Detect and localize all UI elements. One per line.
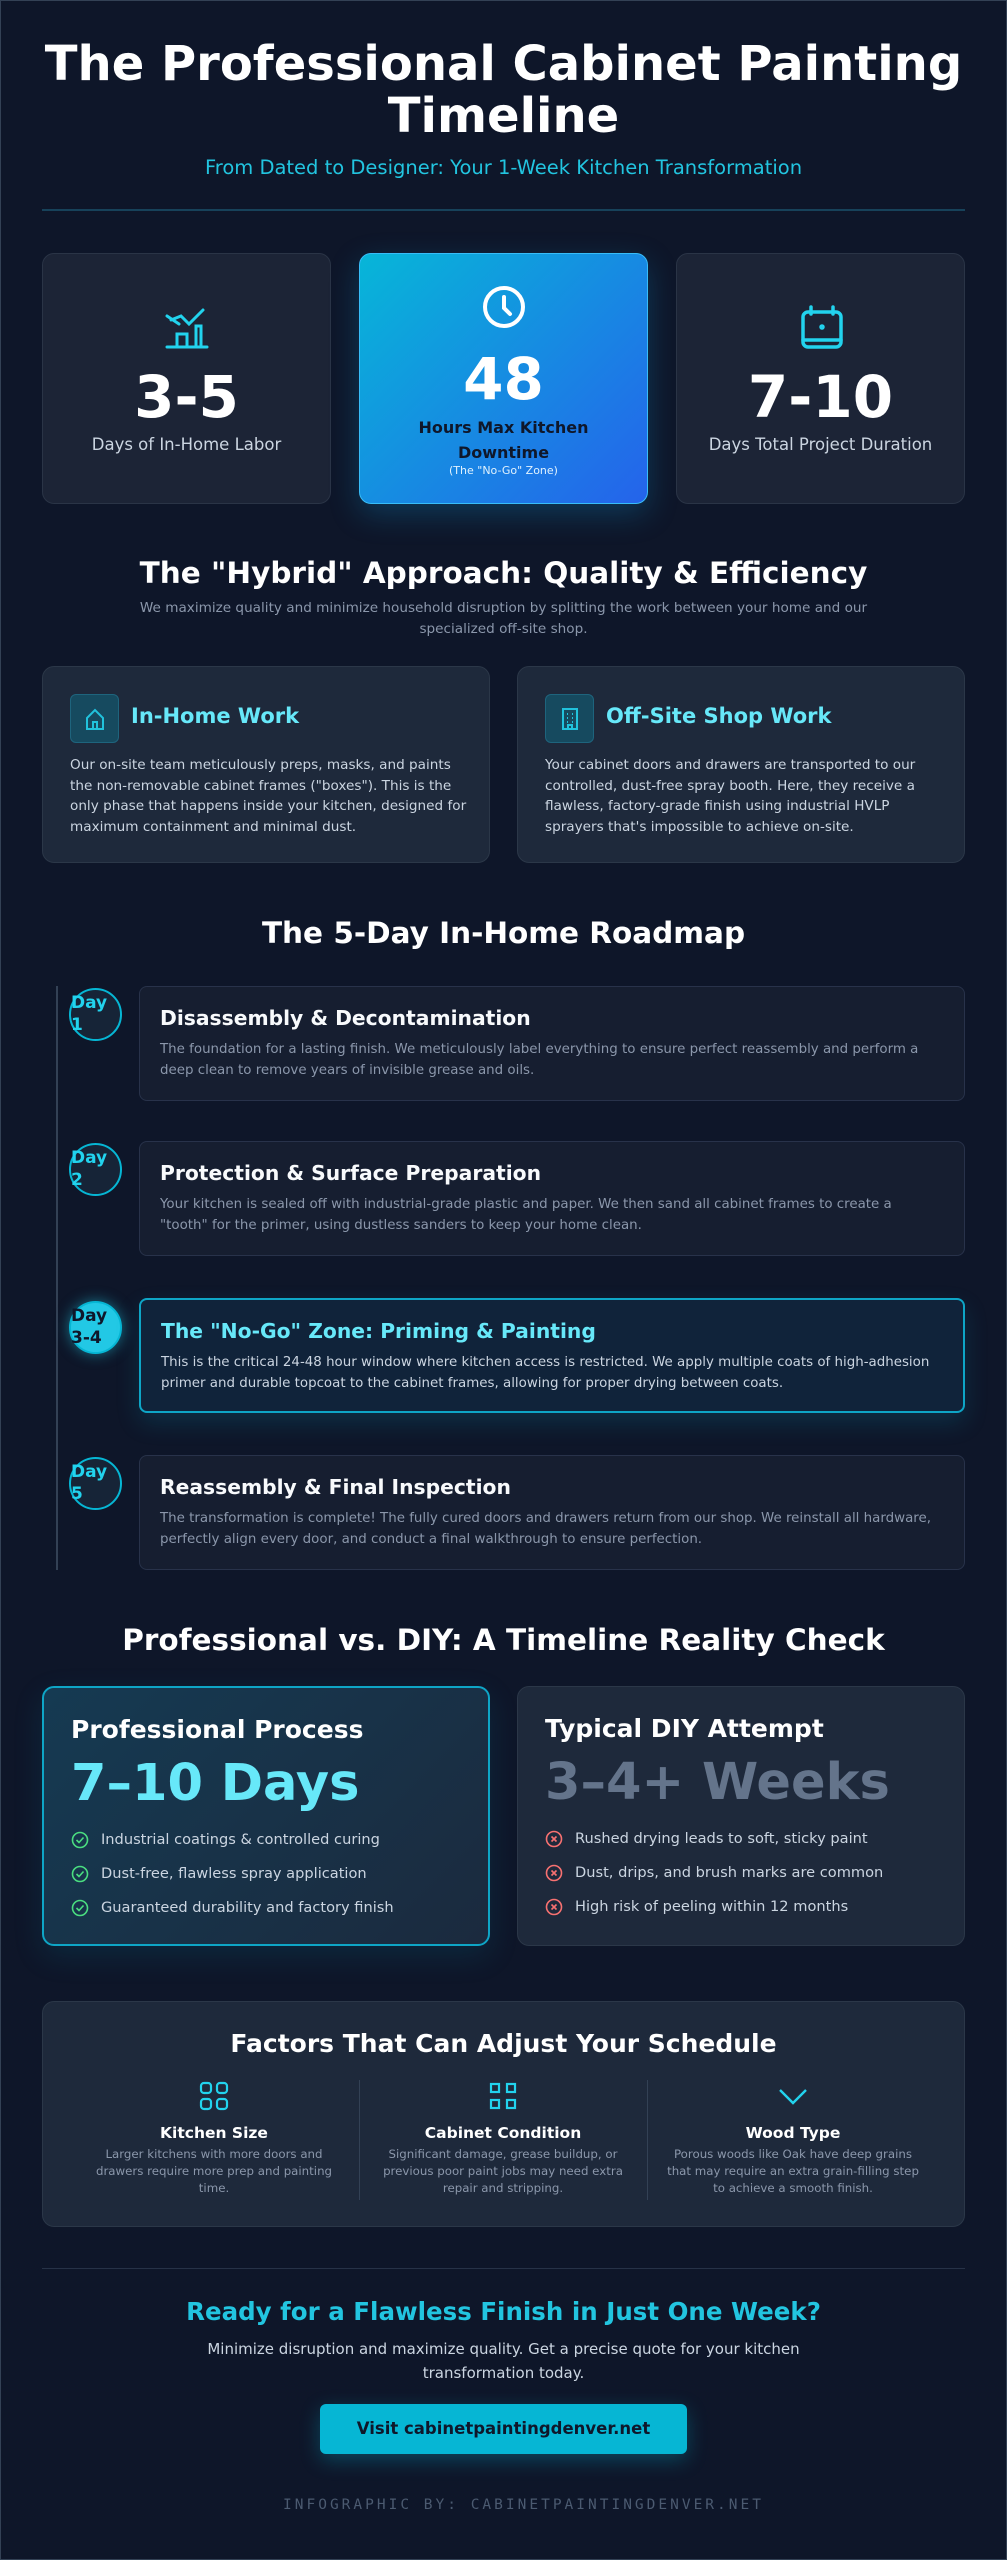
factor: cabinet condition	[383, 2082, 623, 2195]
card: protection: Protection & Surface Preparation	[160, 1161, 541, 1185]
card: no-go zone: The "No-Go" Zone: Priming & Painting	[161, 1319, 596, 1343]
hybrid intro text: We maximize quality and minimize household disruption by splitting the work between your home and our specialized off-site shop.	[140, 600, 867, 637]
timeline day 2: Day	[71, 1148, 107, 1168]
panel: off-site shop work: Off-Site Shop Work	[606, 704, 832, 728]
stat card: total duration: 7-10	[748, 363, 893, 431]
panel: in-home work	[42, 666, 490, 863]
stat card: 48 hours: (The "No-Go" Zone)	[449, 464, 558, 477]
factor: cabinet condition: Cabinet Condition	[425, 2124, 581, 2142]
card: reassembly: Reassembly & Final Inspection	[160, 1475, 511, 1499]
heading: hybrid: The "Hybrid" Approach: Quality & Efficiency	[140, 556, 867, 590]
card: protection: Your kitchen is sealed off with industrial-grade plastic and paper. We then sand all cabinet frames to create a	[160, 1197, 892, 1212]
panel: off-site shop work	[517, 666, 965, 863]
title: Timeline	[388, 88, 619, 144]
stat card: days in-home: Days of In-Home Labor	[92, 435, 281, 454]
CTA text: Minimize disruption and maximize quality. Get a precise quote for your kitchen transformation today.	[207, 2340, 800, 2382]
CTA heading: Ready for a Flawless Finish in Just One Week?	[186, 2297, 821, 2326]
timeline day 1	[69, 986, 965, 1101]
title	[44, 36, 962, 144]
footer credit: INFOGRAPHIC BY: CABINETPAINTINGDENVER.NET	[283, 2497, 764, 2513]
timeline day 1: Day	[71, 993, 107, 1013]
card: no-go zone: This is the critical 24-48 hour window where kitchen access is restricted. We apply multiple coats of high-adhesion primer and durable topcoat to the cabinet frames, allowing for proper drying between coats.	[161, 1355, 929, 1391]
factor: wood type: Porous woods like Oak have deep grains that may require an extra grain-filling step to achieve a smooth finish.	[667, 2147, 919, 2195]
card: disassembly: Disassembly & Decontamination	[160, 1006, 531, 1030]
factor: wood type: Wood Type	[746, 2124, 840, 2142]
list: pro benefits: Dust-free, flawless spray application	[101, 1865, 367, 1882]
factor: kitchen size: Larger kitchens with more doors and drawers require more prep and painting time.	[96, 2147, 332, 2195]
stat card: 48 hours: Hours Max Kitchen	[418, 418, 588, 437]
factor: cabinet condition: Significant damage, grease buildup, or previous poor paint jobs may need extra repair and stripping.	[383, 2147, 623, 2195]
panel: in-home work: Our on-site team meticulously preps, masks, and paints the non-removable cabinet frames ("boxes"). This is the only phase that happens inside your kitchen, designed for maximum containment and minimal dust.	[70, 757, 466, 834]
heading: comparison: Professional vs. DIY: A Timeline Reality Check	[122, 1623, 885, 1657]
list: DIY risks: High risk of peeling within 12 months	[575, 1898, 848, 1915]
stat card: days in-home: 3-5	[134, 363, 239, 431]
panel: professional process: 7–10 Days	[71, 1754, 360, 1813]
timeline day 3-4: Day	[71, 1306, 107, 1326]
heading: roadmap: The 5-Day In-Home Roadmap	[262, 916, 745, 950]
card: disassembly: The foundation for a lasting finish. We meticulously label everything to ensure perfect reassembly and perform a deep clean to remove years of invisible grease and oils.	[160, 1042, 918, 1078]
list: DIY risks	[546, 1830, 883, 1916]
stat card: total duration: Days Total Project Duration	[709, 435, 932, 454]
icon: clock	[483, 286, 525, 328]
icon: building	[545, 694, 594, 743]
stat card: days in-home	[42, 253, 331, 504]
card: reassembly: The transformation is complete! The fully cured doors and drawers return from our shop. We reinstall all hardware, perfectly align every door, and conduct a final walkthrough to ensure perfection.	[160, 1511, 931, 1547]
timeline day 1: 1	[71, 1015, 83, 1035]
title: The Professional Cabinet Painting	[45, 36, 962, 92]
list: pro benefits: Industrial coatings & controlled curing	[101, 1831, 380, 1848]
card: protection	[139, 1141, 965, 1256]
timeline day 5: 5	[71, 1484, 83, 1504]
timeline day 5: Day	[71, 1462, 107, 1482]
timeline day 2: 2	[71, 1170, 83, 1190]
list: DIY risks: Rushed drying leads to soft, sticky paint	[575, 1830, 868, 1847]
panel: DIY attempt	[517, 1686, 965, 1946]
stat card: 48 hours	[359, 253, 648, 504]
icon: house	[70, 694, 119, 743]
subtitle: From Dated to Designer: Your 1-Week Kitchen Transformation	[205, 156, 802, 179]
timeline day 2	[69, 1141, 965, 1256]
card: reassembly	[139, 1455, 965, 1570]
factor: kitchen size: Kitchen Size	[160, 2124, 268, 2142]
panel: DIY attempt: 3–4+ Weeks	[545, 1753, 890, 1812]
panel: DIY attempt: Typical DIY Attempt	[545, 1714, 824, 1743]
factors heading: Factors That Can Adjust Your Schedule	[230, 2029, 777, 2058]
panel: professional process	[42, 1686, 490, 1946]
list: DIY risks: Dust, drips, and brush marks are common	[575, 1864, 883, 1881]
icon: calendar	[801, 305, 843, 349]
timeline day 3-4	[60, 1292, 970, 1428]
list: pro benefits: Guaranteed durability and factory finish	[101, 1899, 394, 1916]
stat card: 48 hours: Downtime	[458, 443, 549, 462]
CTA button: Visit cabinetpaintingdenver.net	[357, 2419, 650, 2438]
factor: kitchen size	[96, 2082, 332, 2195]
stat card: total duration	[676, 253, 965, 504]
icon: tools	[165, 308, 208, 348]
timeline day 3-4: 3-4	[71, 1328, 102, 1348]
stat card: 48 hours: 48	[463, 345, 544, 413]
factor: wood type	[667, 2089, 919, 2195]
panel: in-home work: In-Home Work	[131, 704, 299, 728]
card: disassembly	[139, 986, 965, 1101]
panel: factors	[42, 2001, 965, 2227]
panel: professional process: Professional Process	[71, 1715, 363, 1744]
card: no-go zone	[139, 1298, 965, 1413]
CTA button	[320, 2404, 687, 2454]
timeline day 5	[69, 1455, 965, 1570]
list: pro benefits	[72, 1831, 394, 1916]
panel: off-site shop work: Your cabinet doors and drawers are transported to our controlled, dust-free spray booth. Here, they receive a flawless, factory-grade finish using industrial HVLP sprayers that's impossible to achieve on-site.	[545, 757, 915, 834]
card: protection: "tooth" for the primer, using dustless sanders to keep your home clean.	[160, 1218, 642, 1233]
